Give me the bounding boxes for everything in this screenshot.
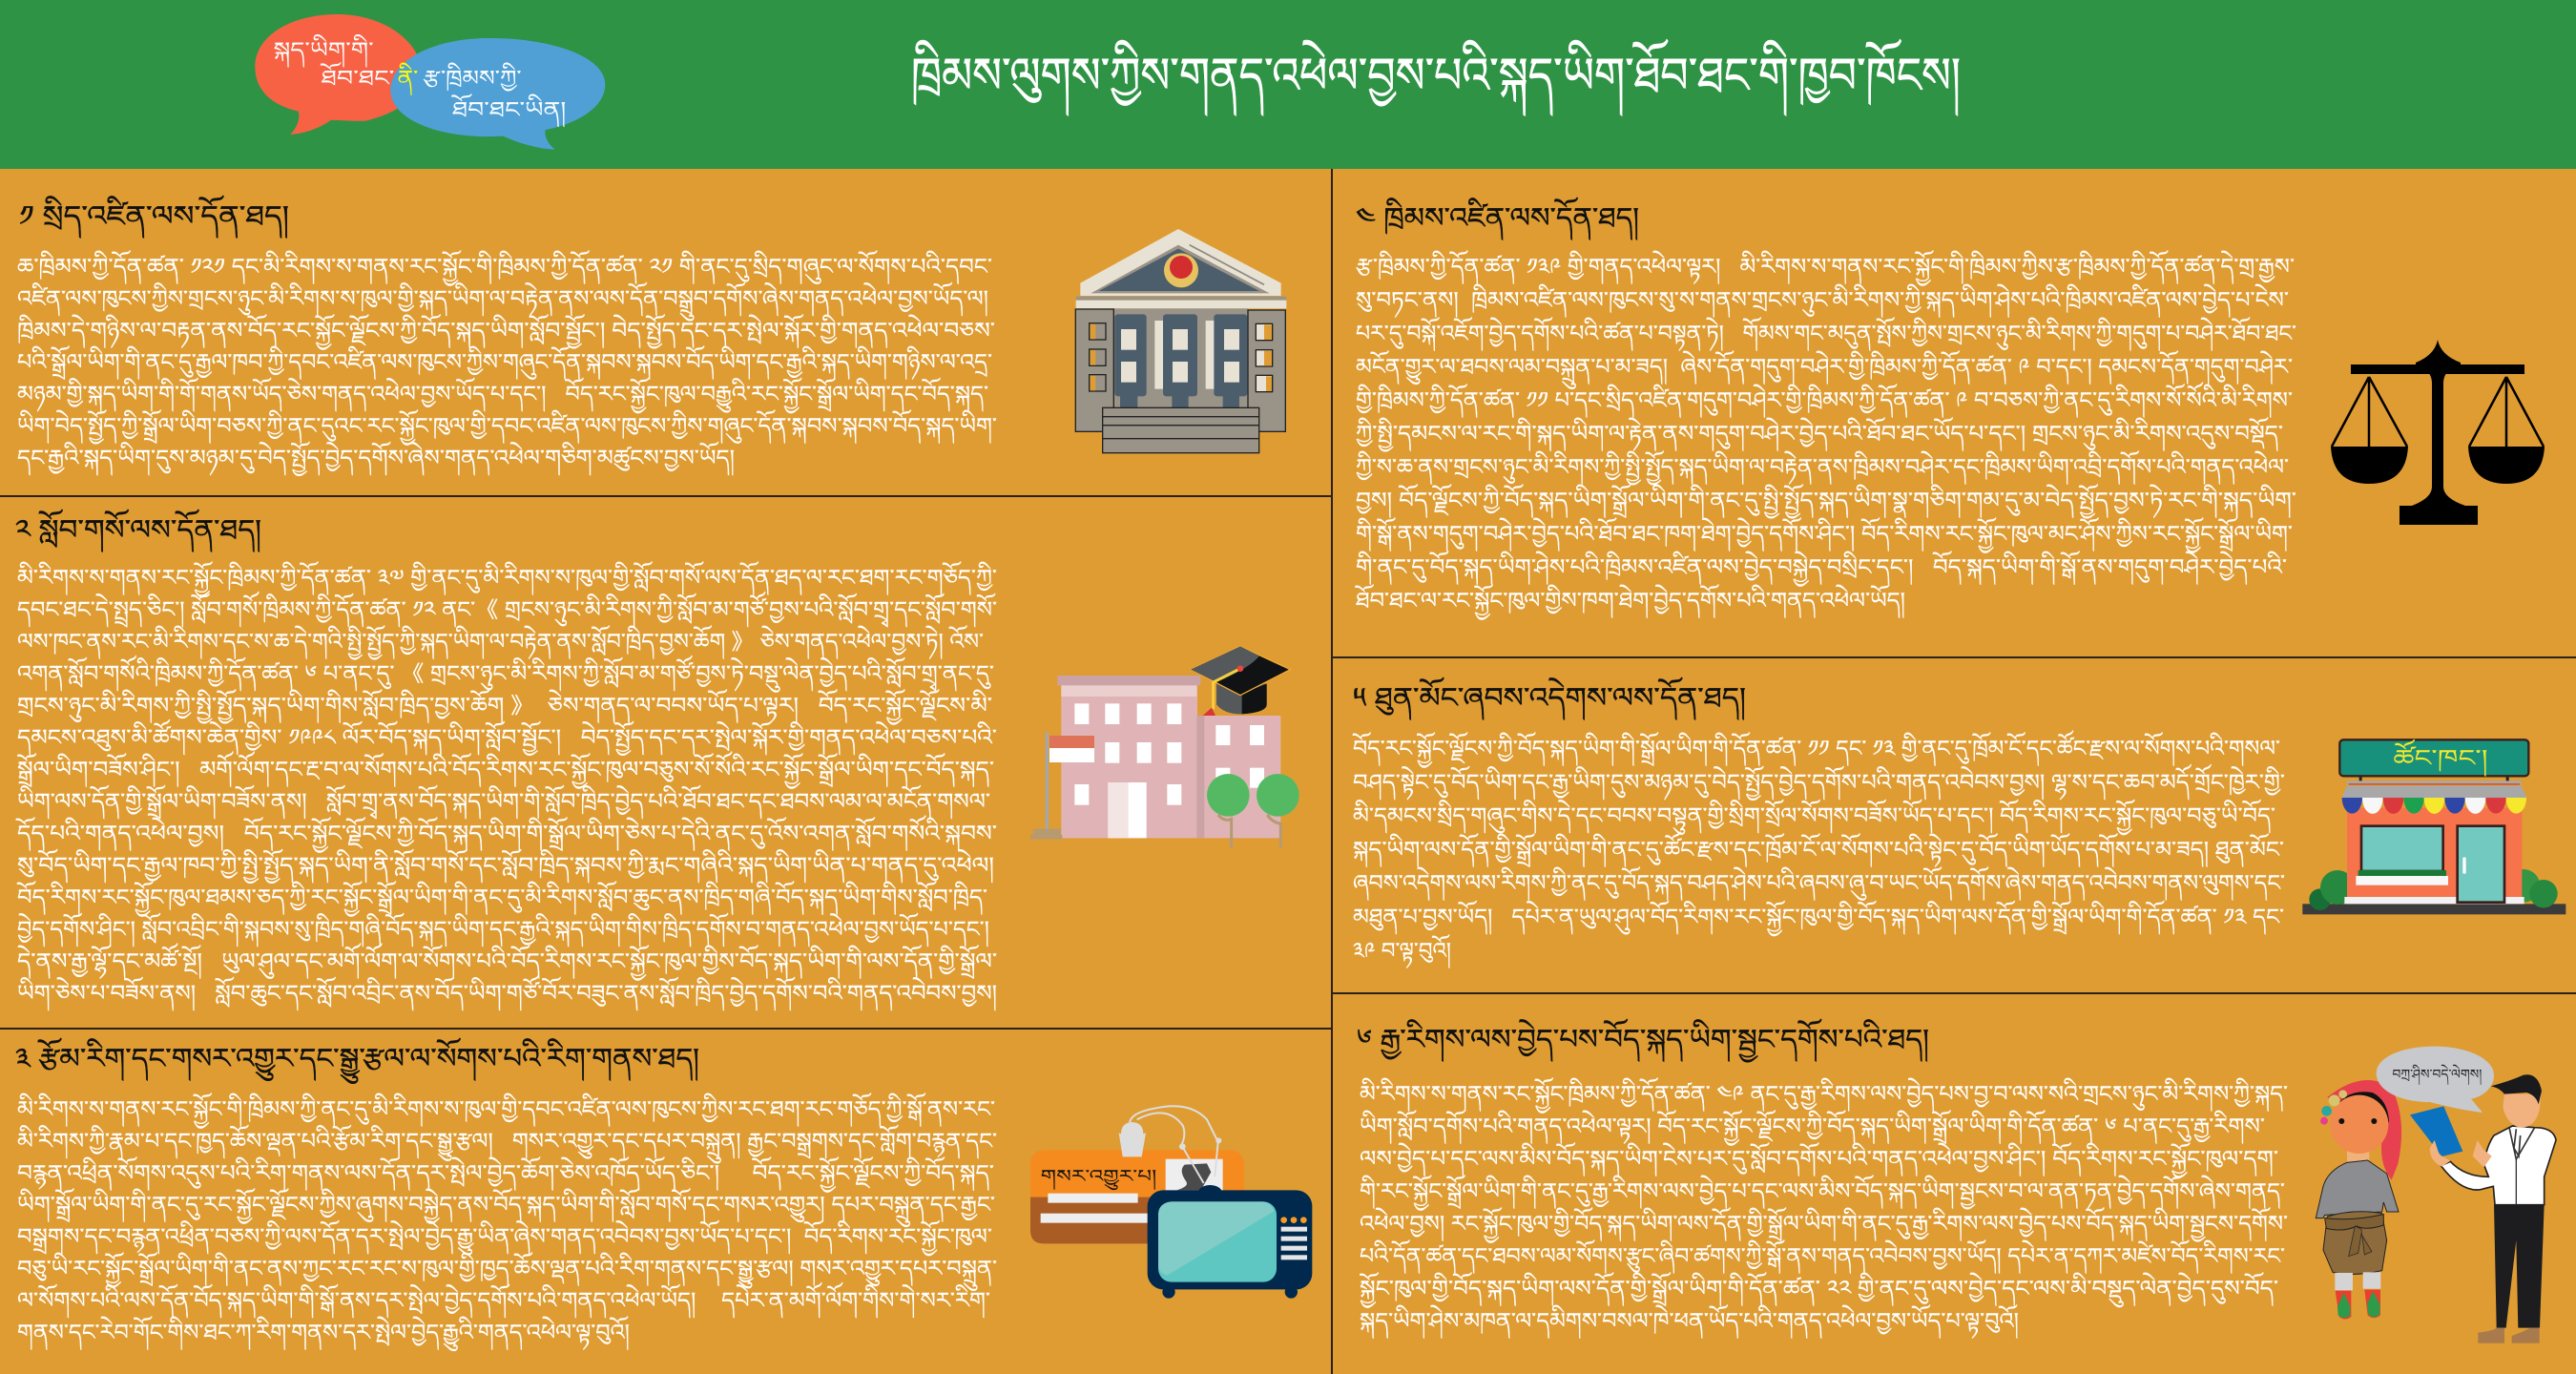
icon: shop front: ཚོང་ཁང་། [2393, 739, 2488, 778]
icon: shop front [2302, 739, 2566, 914]
heading 1: ༡ སྲིད་འཛིན་ལས་དོན་ཐད། [19, 195, 289, 239]
text block 6: ལས་བྱེད་པ་དང་ལས་མིས་བོད་སྐད་ཡིག་ངེས་པར་དུ་སློབ་དགོས་པའི་གནད་འཕེལ་བྱས་ཤིང་། བོད་རིགས་རང་སྐྱོང་ཁུལ་དག་ [1360, 1142, 2278, 1178]
text block 2: སུ་བོད་ཡིག་དང་རྒྱལ་ཁབ་ཀྱི་སྤྱི་སྤྱོད་སྐད་ཡིག་ནི་སློབ་གསོ་དང་སློབ་ཁྲིད་སྐབས་ཀྱི་རྨང་གཞིའི་སྐད་ཡིག་ཡིན་པ་གནད་དུ་འཕེལ། [17, 849, 994, 884]
text block 4: ཀྱི་ས་ཆ་ནས་གྲངས་ཉུང་མི་རིགས་ཀྱི་སྤྱི་སྤྱོད་སྐད་ཡིག་ལ་བརྟེན་ནས་ཁྲིམས་བཤེར་དང་ཁྲིམས་ཡིག་འབྲི་དགོས་པའི་གནད་འཕེལ་ [1356, 450, 2289, 486]
text block 2: འགན་སློབ་གསོའི་ཁྲིམས་ཀྱི་དོན་ཚན་ ༦ པ་ནང་དུ་ 《 གྲངས་ཉུང་མི་རིགས་ཀྱི་སློབ་མ་གཙོ་བྱས་ཏེ་བསྡུ་ལེན་བྱེད་པའི་སློབ་གྲྭ་ནང་དུ་ [17, 655, 994, 693]
text block 1 [17, 250, 997, 476]
logo: two speech bubbles: རྩ་ཁྲིམས་ཀྱི་ [423, 62, 522, 91]
text block 3: ཡིག་སྒྲོལ་ཡིག་གི་ནང་དུ་རང་སྐྱོང་ལྗོངས་ཀྱིས་ཞུགས་བསྐྱེད་ནས་བོད་སྐད་ཡིག་གི་སློབ་གསོ་དང་གསར་འགྱུར། དཔར་བསྐྲུན་དང་རྒྱང་ [17, 1188, 995, 1227]
text block 4: ཐོབ་ཐང་ལ་རང་སྐྱོང་ཁུལ་གྱིས་ཁག་ཐེག་བྱེད་དགོས་པའི་གནད་འཕེལ་ཡོད། [1354, 584, 1905, 620]
text block 6: གི་རང་སྐྱོང་སྒྲོལ་ཡིག་གི་ནང་དུ་རྒྱ་རིགས་ལས་བྱེད་པ་དང་ལས་མིས་བོད་སྐད་ཡིག་སྦྱངས་བ་ལ་ནན་ཏན་བྱེད་དགོས་ཞེས་གནད་ [1360, 1175, 2285, 1211]
text block 1: མཉམ་གྱི་སྐད་ཡིག་གི་གོ་གནས་ཡོད་ཅེས་གནད་འཕེལ་བྱས་ཡོད་པ་དང་། བོད་རང་སྐྱོང་ཁུལ་བརྒྱུའི་རང་སྐྱོང་སྒྲོལ་ཡིག་དང་བོད་སྐད་ [17, 378, 988, 414]
icon: scales of justice [2330, 340, 2545, 525]
panel: 1 administration [17, 195, 1286, 476]
logo: two speech bubbles [255, 14, 605, 150]
text block 4: བྱས། བོད་ལྗོངས་ཀྱི་བོད་སྐད་ཡིག་སྒྲོལ་ཡིག་གི་ནང་དུ་སྤྱི་སྤྱོད་སྐད་ཡིག་སྣ་གཅིག་གམ་དུ་མ་བེད་སྤྱོད་བྱས་ཏེ་རང་གི་སྐད་ཡིག་ [1356, 484, 2296, 519]
text block 3: ལ་སོགས་པའི་ལས་དོན་བོད་སྐད་ཡིག་གི་སྒོ་ནས་དར་སྤེལ་བྱེད་དགོས་པའི་གནད་འཕེལ་ཡོད། དཔེར་ན་མགོ་ལོག་གིས་གེ་སར་རིག་ [17, 1281, 990, 1318]
panel: 3 culture and media [15, 1037, 1313, 1351]
text block 4: ཀྱི་སྤྱི་དམངས་ལ་རང་གི་སྐད་ཡིག་ལ་རྟེན་ནས་གདུག་བཤེར་བྱེད་པའི་ཐོབ་ཐང་ཡོད་པ་དང་། གྲངས་ཉུང་མི་རིགས་འདུས་བསྡོད་ [1356, 417, 2283, 452]
text block 6: འཕེལ་བྱས། རང་སྐྱོང་ཁུལ་གྱི་བོད་སྐད་ཡིག་ལས་དོན་གྱི་སྒྲོལ་ཡིག་གི་ནང་དུ་རྒྱ་རིགས་ལས་བྱེད་པས་བོད་སྐད་ཡིག་སྦྱངས་དགོས་ [1360, 1207, 2288, 1243]
icon: Tibetan woman and man in conversation: བཀྲ་ཤིས་བདེ་ལེགས། [2392, 1065, 2482, 1086]
panel: 6 Han cadres learning Tibetan [1357, 1018, 2557, 1343]
text block 6: པའི་དོན་ཚན་དང་ཐབས་ལམ་སོགས་རྩུང་ཞིབ་ཚགས་ཀྱི་སྒོ་ནས་གནད་འབེབས་བྱས་ཡོད། དཔེར་ན་དཀར་མཛེས་བོད་རིགས་རང་ [1360, 1239, 2285, 1274]
text block 6: མི་རིགས་ས་གནས་རང་སྐྱོང་ཁྲིམས་ཀྱི་དོན་ཚན་ ༤༩ ནང་དུ་རྒྱ་རིགས་ལས་བྱེད་པས་བྱ་བ་ལས་སའི་གྲངས་ཉུང་མི་རིགས་ཀྱི་སྐད་ [1360, 1077, 2288, 1114]
text block 3: གནས་དང་རེབ་གོང་གིས་ཐང་ཀ་རིག་གནས་དར་སྤེལ་བྱེད་རྒྱུའི་གནད་འཕེལ་ལྟ་བུའོ། [17, 1316, 630, 1351]
text block 1: འཛིན་ལས་ཁུངས་ཀྱིས་གྲངས་ཉུང་མི་རིགས་ས་ཁུལ་གྱི་སྐད་ཡིག་ལ་བརྟེན་ནས་ལས་དོན་བསྒྲུབ་དགོས་ཞེས་གནད་འཕེལ་བྱས་ཡོད་ལ། [17, 281, 988, 321]
text block 3: བརྙན་འཕྲིན་སོགས་འདུས་པའི་རིག་གནས་ལས་དོན་དར་སྤེལ་བྱེད་ཆོག་ཅེས་འཁོད་ཡོད་ཅིང་། བོད་རང་སྐྱོང་ལྗོངས་ཀྱི་བོད་སྐད་ [17, 1156, 994, 1193]
text block 3: མི་རིགས་ས་གནས་རང་སྐྱོང་གི་ཁྲིམས་ཀྱི་ནང་དུ་མི་རིགས་ས་ཁུལ་གྱི་དབང་འཛིན་ལས་ཁུངས་ཀྱིས་རང་ཐག་རང་གཅོད་ཀྱི་སྒོ་ནས་རང་ [17, 1093, 995, 1129]
text block 4: མངོན་གྱུར་ལ་ཐབས་ལམ་བསྐྲུན་པ་མ་ཟད། ཞེས་དོན་གདུག་བཤེར་གྱི་ཁྲིམས་ཀྱི་དོན་ཚན་ ༩ བ་དང་། དམངས་དོན་གདུག་བཤེར་ [1356, 350, 2293, 389]
icon: court building [1074, 229, 1286, 454]
text block 3 [17, 1093, 997, 1351]
logo: two speech bubbles: ཐོབ་ཐང་ཡིན། [450, 94, 566, 128]
text block 5: མཐུན་པ་བྱས་ཡོད། དཔེར་ན་ཡུལ་ཤུལ་བོད་རིགས་རང་སྐྱོང་ཁུལ་གྱི་བོད་སྐད་ཡིག་ལས་དོན་གྱི་སྒྲོལ་ཡིག་གི་དོན་ཚན་ ༡༣ དང་ [1353, 901, 2284, 937]
text block 3: མི་རིགས་ཀྱི་རྣམ་པ་དང་ཁྱད་ཆོས་ལྡན་པའི་རྩོམ་རིག་དང་སྒྱུ་རྩལ། གསར་འགྱུར་དང་དཔར་བསྐྲུན། རྒྱང་བསྒྲགས་དང་གློག་བརྙན་དང་ [17, 1124, 997, 1163]
text block 4: སུ་བཏང་ནས། ཁྲིམས་འཛིན་ལས་ཁུངས་སུ་ས་གནས་གྲངས་ཉུང་མི་རིགས་ཀྱི་སྐད་ཡིག་ཤེས་པའི་ཁྲིམས་འཛིན་ལས་བྱེད་པ་ངེས་ [1356, 283, 2289, 318]
text block 5: བཤད་སྟེང་དུ་བོད་ཡིག་དང་རྒྱ་ཡིག་དུས་མཉམ་དུ་བེད་སྤྱོད་བྱེད་དགོས་པའི་གནད་འབེབས་བྱས། ལྷ་ས་དང་ཆབ་མདོ་གྲོང་ཁྱེར་གྱི་ [1353, 763, 2285, 801]
text block 2: བྱེད་དགོས་ཤིང་། སློབ་འབྲིང་གི་སྐབས་སུ་ཁྲིད་གཞི་བོད་སྐད་ཡིག་དང་རྒྱའི་སྐད་ཡིག་གིས་ཁྲིད་དགོས་བ་གནད་འཕེལ་བྱས་ཡོད་པ་དང་། [17, 912, 989, 947]
text block 2: ཡིག་ཅེས་པ་བཟོས་ནས། སློབ་ཆུང་དང་སློབ་འབྲིང་ནས་བོད་ཡིག་གཙོ་བོར་བཟུང་ནས་སློབ་ཁྲིད་བྱེད་དགོས་བའི་གནད་འབེབས་བྱས། [17, 975, 997, 1011]
text block 1: པའི་སྒྲོལ་ཡིག་གི་ནང་དུ་རྒྱལ་ཁབ་ཀྱི་དབང་འཛིན་ལས་ཁུངས་ཀྱིས་གཞུང་དོན་སྐབས་སྐབས་བོད་ཡིག་དང་རྒྱའི་སྐད་ཡིག་གཉིས་ལ་འདྲ་ [17, 345, 992, 380]
heading 6: ༦ རྒྱ་རིགས་ལས་བྱེད་པས་བོད་སྐད་ཡིག་སྦྱང་དགོས་པའི་ཐད། [1357, 1018, 1929, 1063]
text block 2: དམངས་འཐུས་མི་ཚོགས་ཆེན་གྱིས་ ༡༩༩༨ ལོར་བོད་སྐད་ཡིག་སློབ་སྦྱོང་། བེད་སྤྱོད་དང་དར་སྤེལ་སྐོར་གྱི་གནད་འཕེལ་བཅས་པའི་ [17, 719, 997, 756]
text block 3: བཅུ་ཡི་རང་སྐྱོང་སྒྲོལ་ཡིག་གི་ནང་ནས་ཀྱང་རང་རང་ས་ཁུལ་གྱི་ཁྱད་ཆོས་ལྡན་པའི་རིག་གནས་དང་སྒྱུ་རྩལ། གསར་འགྱུར་དཔར་བསྐྲུན་ [17, 1252, 997, 1291]
text block 2: དབང་ཐང་དེ་སྤྲད་ཅིང་། སློབ་གསོ་ཁྲིམས་ཀྱི་དོན་ཚན་ ༡༢ ནང་《 གྲངས་ཉུང་མི་རིགས་ཀྱི་སློབ་མ་གཙོ་བྱས་པའི་སློབ་གྲྭ་དང་སློབ་གསོ་ [17, 592, 997, 628]
text block 5 [1352, 730, 2285, 968]
logo: two speech bubbles: ཐོབ་ཐང་ [320, 61, 395, 90]
text block 5: མི་དམངས་སྲིད་གཞུང་གིས་དེ་དང་བབས་བསྟུན་གྱི་སྲིག་སྲོལ་སོགས་བཟོས་ཡོད་པ་དང་། བོད་རིགས་རང་སྐྱོང་ཁུལ་བཅུ་ཡི་བོད་ [1353, 800, 2275, 836]
text block 5: བོད་རང་སྐྱོང་ལྗོངས་ཀྱི་བོད་སྐད་ཡིག་གི་སྒྲོལ་ཡིག་གི་དོན་ཚན་ ༡༡ དང་ ༡༣ གྱི་ནང་དུ་ཁྲོམ་ངོ་དང་ཚོང་རྫས་ལ་སོགས་པའི་གསལ་ [1352, 730, 2280, 768]
text block 2: མི་རིགས་ས་གནས་རང་སྐྱོང་ཁྲིམས་ཀྱི་དོན་ཚན་ ༣༧ གྱི་ནང་དུ་མི་རིགས་ས་ཁུལ་གྱི་སློབ་གསོ་ལས་དོན་ཐད་ལ་རང་ཐག་རང་གཅོད་ཀྱི་ [17, 561, 997, 597]
text block 4: གི་སྒོ་ནས་གདུག་བཤེར་བྱེད་པའི་ཐོབ་ཐང་ཁག་ཐེག་བྱེད་དགོས་ཤིང་། བོད་རིགས་རང་སྐྱོང་ཁུལ་མང་ཤོས་ཀྱིས་རང་སྐྱོང་སྒྲོལ་ཡིག་ [1356, 517, 2293, 553]
text block 4: རྩ་ཁྲིམས་ཀྱི་དོན་ཚན་ ༡༣༩ གྱི་གནད་འཕེལ་ལྟར། མི་རིགས་ས་གནས་རང་སྐྱོང་གི་ཁྲིམས་ཀྱིས་རྩ་ཁྲིམས་ཀྱི་དོན་ཚན་དེ་གྲ་རྒྱས་ [1356, 250, 2295, 286]
title: ཁྲིམས་ལུགས་ཀྱིས་གནད་འཕེལ་བྱས་པའི་སྐད་ཡིག་ཐོབ་ཐང་གི་ཁྱབ་ཁོངས། [911, 38, 1961, 116]
logo: two speech bubbles: ནི་ [398, 62, 419, 95]
text block 1: ཆ་ཁྲིམས་ཀྱི་དོན་ཚན་ ༡༢༡ དང་མི་རིགས་ས་གནས་རང་སྐྱོང་གི་ཁྲིམས་ཀྱི་དོན་ཚན་ ༢༡ གི་ནང་དུ་སྲིད་གཞུང་ལ་སོགས་པའི་དབང་ [17, 250, 992, 286]
logo: two speech bubbles: སྐད་ཡིག་གི་ [274, 34, 374, 68]
text block 2: བོད་རིགས་རང་སྐྱོང་ཁུལ་ཐམས་ཅད་ཀྱི་རང་སྐྱོང་སྒྲོལ་ཡིག་གི་ནང་དུ་མི་རིགས་སློབ་ཆུང་ནས་ཁྲིད་གཞི་བོད་སྐད་ཡིག་གིས་སློབ་ཁྲིད་ [16, 881, 987, 917]
heading 5: ༥ ཐུན་མོང་ཞབས་འདེགས་ལས་དོན་ཐད། [1353, 677, 1746, 720]
icon: Tibetan woman and man in conversation [2315, 1046, 2557, 1343]
text block 6 [1359, 1077, 2288, 1339]
text block 4: གྱི་ཁྲིམས་ཀྱི་དོན་ཚན་ ༡༡ པ་དང་སྲིད་འཛིན་གདུག་བཤེར་གྱི་ཁྲིམས་ཀྱི་དོན་ཚན་ ༩ བ་བཅས་ཀྱི་ནང་དུ་རིགས་སོ་སོའི་མི་རིགས་ [1356, 382, 2293, 418]
icon: press card and television: གསར་འགྱུར་པ། [1041, 1166, 1156, 1190]
text block 2: སྒྲོལ་ཡིག་བཟོས་ཤིང་། མགོ་ལོག་དང་རྔ་བ་ལ་སོགས་པའི་བོད་རིགས་རང་སྐྱོང་ཁུལ་བཅུས་སོ་སོའི་རང་སྐྱོང་སྒྲོལ་ཡིག་དང་བོད་སྐད་ [16, 751, 994, 789]
text block 2: གྲངས་ཉུང་མི་རིགས་ཀྱི་སྤྱི་སྤྱོད་སྐད་ཡིག་གིས་སློབ་ཁྲིད་བྱས་ཆོག 》 ཅེས་གནད་ལ་བབས་ཡོད་པ་ལྟར། བོད་རང་སྐྱོང་ལྗོངས་མི་ [17, 689, 992, 725]
text block 2: དེ་ནས་རྒྱ་ལྷོ་དང་མཚོ་སྔོ། ཡུལ་ཤུལ་དང་མགོ་ལོག་ལ་སོགས་པའི་བོད་རིགས་རང་སྐྱོང་ཁུལ་གྱིས་བོད་སྐད་ཡིག་གི་ལས་དོན་གྱི་སྒྲོལ་ [17, 943, 997, 981]
panel: 4 judiciary [1354, 197, 2545, 620]
icon: school with graduation cap [1030, 645, 1299, 847]
heading 2: ༢ སློབ་གསོ་ལས་དོན་ཐད། [15, 509, 261, 552]
panel: 2 education [15, 509, 1299, 1011]
text block 2: ཡིག་ལས་དོན་གྱི་སྒྲོལ་ཡིག་བཟོས་ནས། སློབ་གྲྭ་ནས་བོད་སྐད་ཡིག་གི་སློབ་ཁྲིད་བྱེད་པའི་ཐོབ་ཐང་དང་ཐབས་ལམ་ལ་མངོན་གསལ་ [17, 784, 990, 819]
text block 6: སྐད་ཡིག་ཤེས་མཁན་ལ་དམིགས་བསལ་ཁེ་ཕན་ཡོད་པའི་གནད་འཕེལ་བྱས་ཡོད་པ་ལྟ་བུའོ། [1360, 1304, 2019, 1339]
icon: press card and television [1030, 1105, 1313, 1299]
header band [0, 0, 2576, 169]
heading 4: ༤ ཁྲིམས་འཛིན་ལས་དོན་ཐད། [1356, 197, 1639, 240]
text block 1: དང་རྒྱའི་སྐད་ཡིག་དུས་མཉམ་དུ་བེད་སྤྱོད་བྱེད་དགོས་ཞེས་གནད་འཕེལ་གཅིག་མཚུངས་བྱས་ཡོད། [17, 441, 735, 476]
text block 2: ལས་ཁང་ནས་རང་མི་རིགས་དང་ས་ཆ་དེ་གའི་སྤྱི་སྤྱོད་ཀྱི་སྐད་ཡིག་ལ་བརྟེན་ནས་སློབ་ཁྲིད་བྱས་ཆོག 》 ཅེས་གནད་འཕེལ་བྱས་ཏེ། འོས་ [17, 625, 984, 660]
text block 3: བསྒྲགས་དང་བརྙན་འཕྲིན་བཅས་ཀྱི་ལས་དོན་དར་སྤེལ་བྱེད་རྒྱུ་ཡིན་ཞེས་གནད་འབེབས་བྱས་ཡོད་པ་དང་། བོད་རིགས་རང་སྐྱོང་ཁུལ་ [17, 1220, 992, 1257]
text block 5: ཞབས་འདེགས་ལས་རིགས་ཀྱི་ནང་དུ་བོད་སྐད་བཤད་ཤེས་པའི་ཞབས་ཞུ་བ་ཡང་ཡོད་དགོས་ཞེས་གནད་འབེབས་གནས་ལུགས་དང་ [1353, 866, 2285, 901]
text block 4: གི་ནང་དུ་བོད་སྐད་ཡིག་ཤེས་པའི་ཁྲིམས་འཛིན་ལས་བྱེད་བསྐྱེད་བསྲིང་དང་། བོད་སྐད་ཡིག་གི་སྒོ་ནས་གདུག་བཤེར་བྱེད་པའི་ [1356, 551, 2287, 587]
text block 6: ཡིག་སློབ་དགོས་པའི་གནད་འཕེལ་ལྟར། བོད་རང་སྐྱོང་ལྗོངས་ཀྱི་བོད་སྐད་ཡིག་སྒྲོལ་ཡིག་གི་དོན་ཚན་ ༦ པ་ནང་དུ་རྒྱ་རིགས་ [1360, 1110, 2265, 1146]
text block 1: ཁྲིམས་དེ་གཉིས་ལ་བརྟན་ནས་བོད་རང་སྐྱོང་ལྗོངས་ཀྱི་བོད་སྐད་ཡིག་སློབ་སྦྱོང་། བེད་སྤྱོད་དང་དར་སྤེལ་སྐོར་གྱི་གནད་འཕེལ་བཅས་ [17, 314, 995, 350]
text block 5: སྐད་ཡིག་ལས་དོན་གྱི་སྒྲོལ་ཡིག་གི་ནང་དུ་ཚོང་རྫས་དང་ཁྲོམ་ངོ་ལ་སོགས་པའི་སྟེང་དུ་བོད་ཡིག་ཡོད་དགོས་པ་མ་ཟད། ཐུན་མོང་ [1353, 831, 2284, 867]
text block 4 [1354, 250, 2296, 620]
panel: 5 public services [1352, 677, 2566, 968]
text block 6: སྐྱོང་ཁུལ་གྱི་བོད་སྐད་ཡིག་ལས་དོན་གྱི་སྒྲོལ་ཡིག་གི་དོན་ཚན་ ༢༢ གྱི་ནང་དུ་ལས་བྱེད་དང་ལས་མི་བསྡུད་ལེན་བྱེད་དུས་བོད་ [1359, 1272, 2278, 1308]
text block 5: ༣༩ བ་ལྟ་བུའོ། [1353, 934, 1451, 968]
heading 3: ༣ རྩོམ་རིག་དང་གསར་འགྱུར་དང་སྒྱུ་རྩལ་ལ་སོགས་པའི་རིག་གནས་ཐད། [15, 1037, 699, 1084]
text block 2: དོད་པའི་གནད་འཕེལ་བྱས། བོད་རང་སྐྱོང་ལྗོངས་ཀྱི་བོད་སྐད་ཡིག་གི་སྒྲོལ་ཡིག་ཅེས་པ་དེའི་ནང་དུ་འོས་འགན་སློབ་གསོའི་སྐབས་ [15, 815, 997, 853]
text block 1: ཡིག་བེད་སྤྱོད་ཀྱི་སྒྲོལ་ཡིག་བཅས་ཀྱི་ནང་དུའང་རང་སྐྱོང་ཁུལ་གྱི་དབང་འཛིན་ལས་ཁུངས་ཀྱིས་གཞུང་དོན་སྐབས་སྐབས་བོད་སྐད་ཡིག་ [17, 409, 997, 446]
text block 4: པར་དུ་བསྐོ་འཇོག་བྱེད་དགོས་པའི་ཚན་པ་བསྟན་ཏེ། གོམས་གང་མདུན་སྤོས་ཀྱིས་གྲངས་ཉུང་མི་རིགས་ཀྱི་གདུག་པ་བཤེར་ཐོབ་ཐང་ [1356, 317, 2296, 351]
text block 2 [15, 561, 997, 1011]
